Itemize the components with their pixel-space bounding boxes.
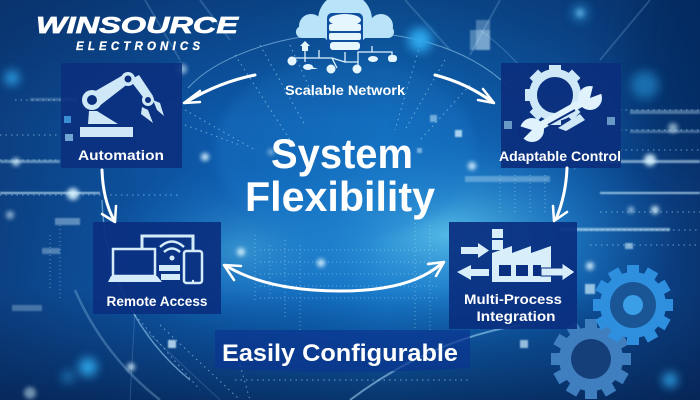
arrow: automation to remote access: [102, 170, 116, 222]
panel: scalable network: [285, 0, 406, 98]
arrow: adaptable control to integration: [553, 168, 567, 221]
gear: lower: [551, 319, 631, 399]
panel: adaptable control: [499, 63, 621, 168]
panel: multi-process integration: [449, 222, 577, 329]
label: remote access: Remote Access: [106, 294, 208, 309]
title: System: [271, 130, 413, 177]
label: scalable network: Scalable Network: [285, 83, 406, 98]
panel: multi-process integration: Integration: [476, 309, 556, 324]
gears decoration: [551, 265, 673, 399]
gear: upper right: [593, 265, 673, 345]
icon: cloud database network: [288, 0, 397, 74]
logo: [36, 12, 239, 53]
banner: easily configurable: Easily Configurable: [222, 340, 458, 367]
banner: easily configurable: [215, 330, 470, 372]
icon: devices with wifi: [108, 236, 202, 283]
arrow: two-way remote access and integration: [224, 262, 444, 291]
panel: remote access: [93, 222, 221, 314]
title: Flexibility: [245, 173, 436, 220]
label: multi-process integration: Multi-Process: [464, 292, 562, 307]
logo: WINSOURCE: [36, 12, 239, 38]
arrow: network to automation: [184, 75, 255, 103]
panel: automation: [61, 63, 182, 168]
title: [245, 130, 436, 220]
label: automation: Automation: [78, 148, 164, 163]
logo: ELECTRONICS: [76, 41, 200, 53]
label: adaptable control: Adaptable Control: [499, 149, 621, 164]
icon: gear and wrench: [516, 65, 606, 142]
arrows: cycle between features: [102, 75, 567, 291]
arrow: network to adaptable control: [435, 75, 494, 103]
icon: robot arm: [80, 72, 164, 137]
icon: factory with arrows: [457, 229, 575, 282]
